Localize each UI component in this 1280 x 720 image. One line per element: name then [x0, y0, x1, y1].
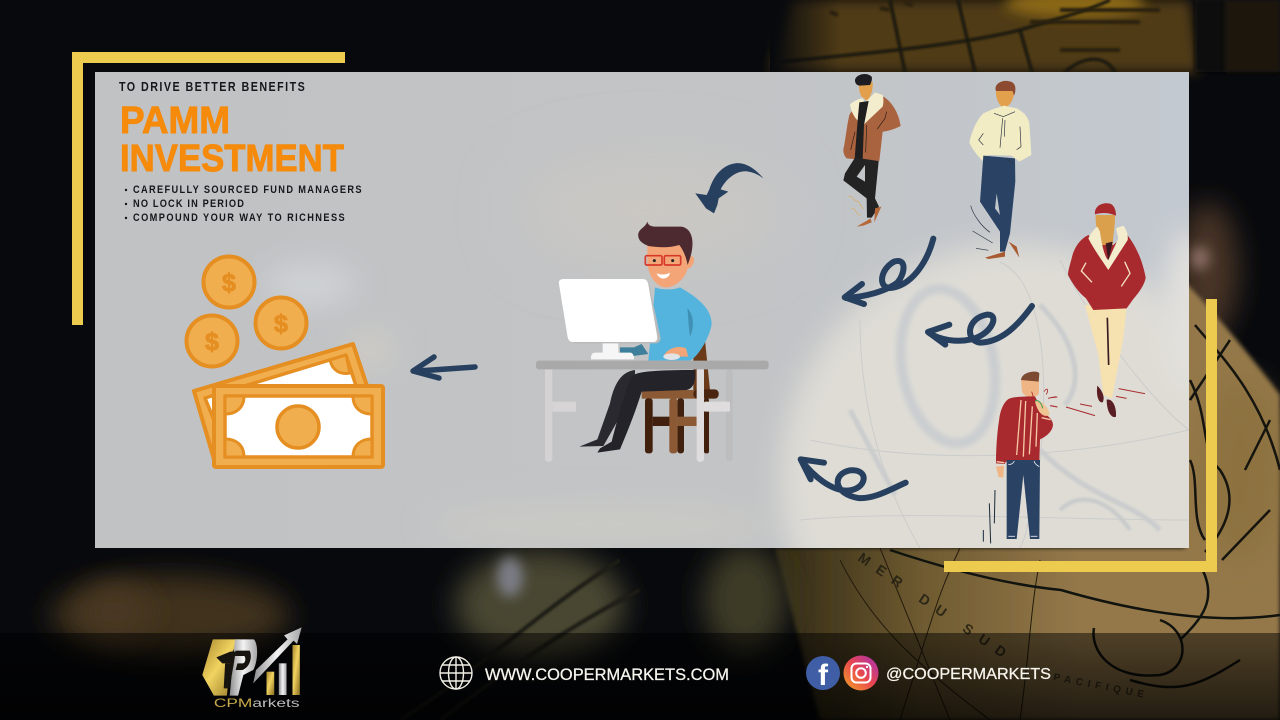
- person: cream shirt: [969, 81, 1031, 259]
- icon: coins: $: [274, 310, 288, 338]
- person: red striped sweater: [983, 372, 1057, 543]
- bullet list: [125, 184, 362, 224]
- icon: facebook: f: [818, 659, 829, 692]
- icon: coins: [186, 256, 306, 366]
- pants: [579, 370, 695, 453]
- background: blurred antique globes: PACIFIQUE: [1052, 672, 1145, 701]
- title: PAMM: [120, 100, 230, 142]
- subtitle: TO DRIVE BETTER BENEFITS: [119, 80, 305, 94]
- panel: main translucent card: [95, 72, 1189, 548]
- icon: front bill: [214, 386, 383, 467]
- icon: money coins and bills: [186, 256, 383, 467]
- desk: [536, 361, 769, 462]
- person: brown jacket: [843, 74, 901, 227]
- monitor: [559, 279, 661, 359]
- arrow: top curved: [695, 163, 763, 213]
- chair: [642, 312, 719, 453]
- icon: instagram: [844, 656, 878, 690]
- background: blurred antique globes: MER DU SUD: [855, 549, 1009, 660]
- arrows: curly from investors: [801, 239, 1032, 498]
- social handle: @COOPERMARKETS: [886, 666, 1051, 683]
- bullet list: COMPOUND YOUR WAY TO RICHNESS: [133, 212, 345, 224]
- arrow: man to money: [413, 357, 475, 378]
- icon: coins: $: [222, 269, 236, 297]
- logo mark: [202, 627, 302, 696]
- bullet list: NO LOCK IN PERIOD: [133, 198, 244, 210]
- icon: coins: $: [205, 328, 219, 356]
- title: INVESTMENT: [120, 138, 344, 180]
- arrow: curly 1: [845, 239, 933, 304]
- person: red jacket: [1051, 203, 1146, 417]
- icon: back bill: [194, 344, 369, 466]
- icon: facebook: [806, 656, 840, 692]
- torso: [648, 287, 712, 361]
- yellow bracket: bottom right: [944, 299, 1217, 572]
- bullet list: CAREFULLY SOURCED FUND MANAGERS: [133, 184, 362, 196]
- title: [120, 100, 344, 180]
- website: WWW.COOPERMARKETS.COM: [485, 666, 729, 684]
- arrow: curly 3: [801, 459, 906, 498]
- logo: CPMarkets: [202, 627, 302, 710]
- hand and mouse: [663, 347, 688, 357]
- footer band: [0, 633, 1280, 720]
- logo wordmark: CPM arkets: [214, 696, 300, 710]
- head: [638, 222, 694, 287]
- illustration: man at desk: [536, 222, 769, 462]
- yellow bracket: top left: [72, 52, 345, 325]
- arrow: curly 2: [928, 306, 1032, 345]
- icon: globe: [440, 657, 472, 689]
